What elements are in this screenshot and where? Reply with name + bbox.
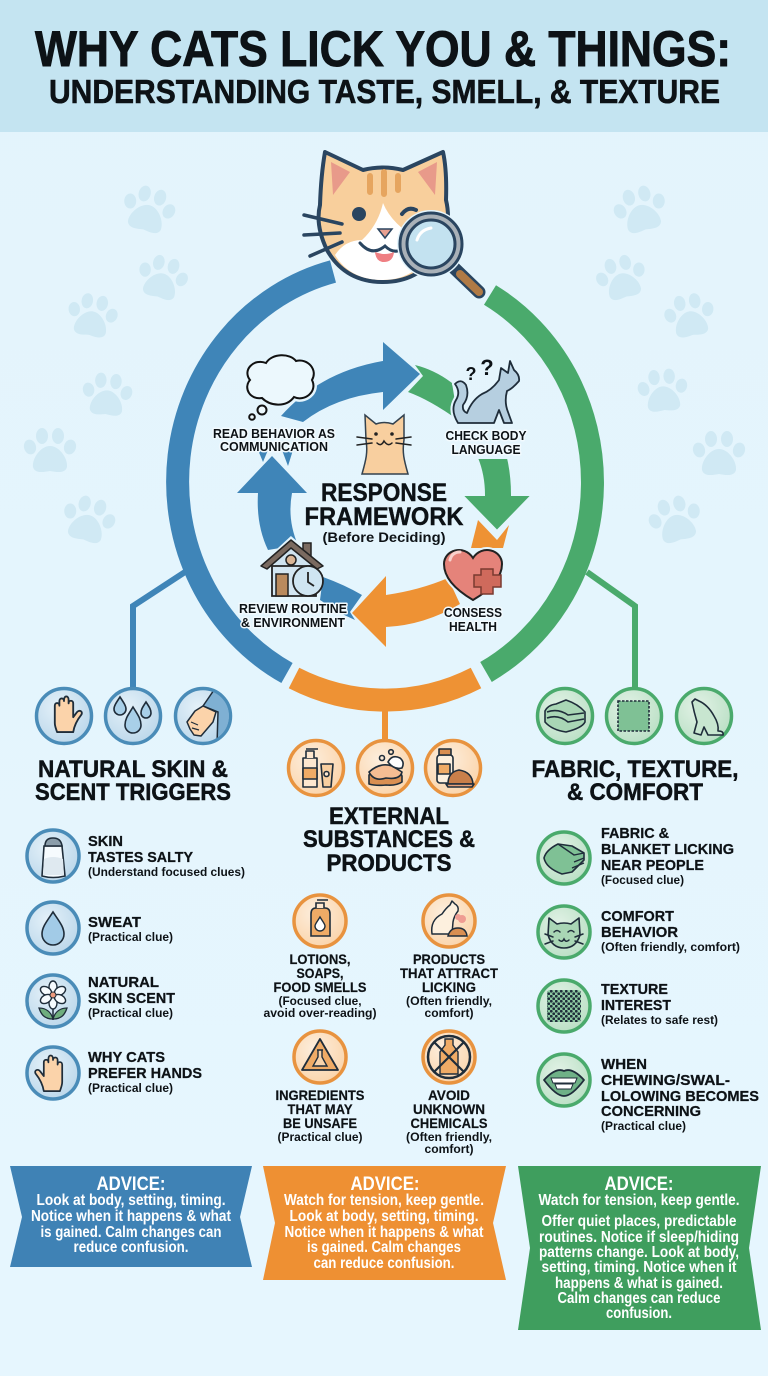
item: why cats prefer hands bbox=[27, 1047, 202, 1099]
heading: PRODUCTS bbox=[326, 850, 452, 877]
advice banner: blue: reduce confusion. bbox=[74, 1239, 188, 1256]
heading bbox=[35, 756, 231, 806]
advice banner: blue: Look at body, setting, timing. bbox=[36, 1192, 226, 1209]
label: consess health bbox=[444, 605, 502, 634]
item: why cats prefer hands: PREFER HANDS bbox=[88, 1065, 202, 1082]
icon: house with clock bbox=[261, 540, 323, 596]
connector: green bbox=[587, 572, 635, 690]
item: products that attract licking bbox=[400, 895, 498, 1020]
advice banner: green: setting, timing. Notice when it bbox=[542, 1259, 736, 1276]
advice banner: orange: Look at body, setting, timing. bbox=[290, 1208, 478, 1225]
advice banner: blue: Notice when it happens & what bbox=[31, 1208, 231, 1225]
ring segment: blue bbox=[178, 272, 333, 673]
panel: fabric, texture and comfort bbox=[532, 688, 759, 1133]
icon row: blue bbox=[36, 688, 230, 744]
arrow: green top bbox=[408, 365, 458, 420]
advice banner: blue bbox=[10, 1166, 252, 1267]
item: natural skin scent: SKIN SCENT bbox=[88, 990, 175, 1007]
arrow: green down bbox=[462, 458, 532, 531]
item: when chewing becomes concerning bbox=[538, 1054, 759, 1133]
item: products that attract licking: (Often friendly, bbox=[406, 994, 492, 1008]
arrow: blue left bbox=[237, 456, 307, 550]
icon row: green bbox=[538, 688, 732, 744]
item: avoid unknown chemicals bbox=[406, 1031, 492, 1156]
icon row: orange bbox=[288, 740, 480, 796]
advice banner: orange: can reduce confusion. bbox=[314, 1255, 454, 1272]
item: fabric and blanket licking: FABRIC & bbox=[601, 825, 669, 842]
item: when chewing becomes concerning: LOLOWING BECOMES bbox=[601, 1088, 759, 1105]
item: ingredients that may be unsafe bbox=[276, 1031, 364, 1144]
icon: heart with cross bbox=[444, 550, 502, 600]
advice banner: green bbox=[518, 1166, 761, 1330]
item: when chewing becomes concerning: WHEN bbox=[601, 1056, 647, 1073]
item: avoid unknown chemicals: comfort) bbox=[424, 1142, 474, 1156]
advice banner: orange: ADVICE: bbox=[350, 1174, 420, 1195]
connector: orange bbox=[382, 705, 388, 742]
item: fabric and blanket licking: (Focused clue) bbox=[601, 873, 684, 887]
header band bbox=[0, 0, 768, 132]
item: texture interest bbox=[538, 980, 718, 1032]
item: skin tastes salty: (Understand focused clues) bbox=[88, 865, 245, 879]
connector: blue bbox=[133, 572, 185, 690]
icon: sitting cat with question marks: ? bbox=[480, 355, 494, 380]
item: comfort behavior: (Often friendly, comfort) bbox=[601, 940, 740, 954]
center title: (Before Deciding) bbox=[322, 530, 446, 545]
item: ingredients that may be unsafe: BE UNSAFE bbox=[283, 1115, 357, 1131]
icon: cat scratching bbox=[692, 699, 723, 735]
background paw prints bbox=[22, 181, 747, 548]
item: avoid unknown chemicals: CHEMICALS bbox=[410, 1115, 488, 1131]
item: comfort behavior bbox=[538, 906, 740, 958]
ring segment: green bbox=[486, 295, 592, 672]
advice banner: green: Offer quiet places, predictable bbox=[542, 1213, 737, 1230]
icon: open hand bbox=[55, 696, 82, 732]
label: review routine: REVIEW ROUTINE bbox=[239, 601, 347, 616]
item: why cats prefer hands: (Practical clue) bbox=[88, 1081, 173, 1095]
arrow tail: blue fragments bbox=[258, 450, 293, 466]
icon: arm reaching bbox=[186, 692, 229, 738]
advice banner: green: confusion. bbox=[606, 1305, 672, 1322]
heading: SUBSTANCES & bbox=[303, 826, 475, 853]
item: texture interest: TEXTURE bbox=[601, 981, 668, 998]
arrow tail: blue bbox=[320, 577, 362, 620]
advice banner: blue: is gained. Calm changes can bbox=[40, 1224, 222, 1241]
item: lotions soaps food smells: avoid over-reading) bbox=[264, 1006, 377, 1020]
heading: & COMFORT bbox=[567, 779, 703, 806]
ring segment: orange bbox=[294, 678, 476, 700]
label: consess health: HEALTH bbox=[449, 619, 497, 634]
advice banner: orange: Notice when it happens & what bbox=[284, 1224, 484, 1241]
item: sweat: (Practical clue) bbox=[88, 930, 173, 944]
outer ring bbox=[178, 272, 592, 700]
item: products that attract licking: LICKING bbox=[422, 979, 476, 995]
question marks: ? bbox=[466, 364, 476, 384]
item: ingredients that may be unsafe: (Practical clue) bbox=[278, 1130, 362, 1144]
arrow: blue top bbox=[281, 342, 420, 422]
icon: small center cat bbox=[357, 415, 411, 474]
item: natural skin scent bbox=[27, 974, 175, 1027]
item: why cats prefer hands: WHY CATS bbox=[88, 1049, 165, 1066]
arrow tail: orange bbox=[471, 520, 509, 548]
item: sweat: SWEAT bbox=[88, 914, 141, 931]
panel: external substances and products bbox=[264, 740, 498, 1156]
label: check body language bbox=[446, 428, 527, 457]
item: comfort behavior: BEHAVIOR bbox=[601, 924, 678, 941]
item: ingredients that may be unsafe: INGREDIENTS bbox=[276, 1087, 364, 1103]
center title: RESPONSE bbox=[321, 479, 447, 507]
item: lotions soaps food smells bbox=[264, 895, 377, 1020]
item: avoid unknown chemicals: UNKNOWN bbox=[413, 1101, 485, 1117]
label: review routine bbox=[239, 601, 347, 630]
item: natural skin scent: (Practical clue) bbox=[88, 1006, 173, 1020]
advice banner: green: Watch for tension, keep gentle. bbox=[538, 1192, 740, 1209]
item: texture interest: (Relates to safe rest) bbox=[601, 1013, 718, 1027]
magnifying glass bbox=[452, 266, 479, 292]
item: products that attract licking: THAT ATTRACT bbox=[400, 965, 498, 981]
advice banner: orange bbox=[263, 1166, 506, 1280]
icon: thought cloud bbox=[247, 355, 314, 420]
item: fabric and blanket licking: NEAR PEOPLE bbox=[601, 857, 704, 874]
label: read behavior bbox=[213, 426, 335, 454]
item: products that attract licking: comfort) bbox=[424, 1006, 474, 1020]
label: review routine: & ENVIRONMENT bbox=[241, 615, 345, 630]
panel: natural skin and scent triggers bbox=[27, 688, 245, 1099]
item: lotions soaps food smells: FOOD SMELLS bbox=[274, 979, 366, 995]
item: lotions soaps food smells: LOTIONS, bbox=[290, 951, 350, 967]
label: read behavior: COMMUNICATION bbox=[220, 439, 328, 454]
heading bbox=[532, 756, 738, 806]
icon: fabric swatch bbox=[618, 701, 649, 731]
item: when chewing becomes concerning: CHEWING/SWAL- bbox=[601, 1072, 730, 1089]
heading: NATURAL SKIN & bbox=[38, 756, 228, 783]
icon: bottle and food bowl bbox=[437, 749, 474, 787]
advice banner: green: Calm changes can reduce bbox=[558, 1290, 721, 1307]
item: when chewing becomes concerning: CONCERNING bbox=[601, 1103, 701, 1120]
cat mascot with magnifying glass bbox=[304, 152, 479, 292]
advice banner: orange: is gained. Calm changes bbox=[307, 1239, 461, 1256]
arrow: orange bbox=[352, 576, 460, 647]
item: natural skin scent: NATURAL bbox=[88, 974, 159, 991]
label: check body language: LANGUAGE bbox=[452, 442, 521, 457]
icon: folded blanket bbox=[545, 700, 585, 732]
heading: EXTERNAL bbox=[329, 803, 449, 830]
advice banner: green: patterns change. Look at body, bbox=[539, 1244, 739, 1261]
item: lotions soaps food smells: (Focused clue, bbox=[278, 994, 362, 1008]
item: ingredients that may be unsafe: THAT MAY bbox=[288, 1101, 353, 1117]
item: avoid unknown chemicals: (Often friendly, bbox=[406, 1130, 492, 1144]
heading bbox=[303, 803, 475, 877]
advice banner: green: happens & what is gained. bbox=[555, 1275, 723, 1292]
heading: SCENT TRIGGERS bbox=[35, 779, 231, 806]
item: avoid unknown chemicals: AVOID bbox=[428, 1087, 470, 1103]
icon: three drops bbox=[114, 697, 151, 733]
advice banner: orange: Watch for tension, keep gentle. bbox=[284, 1192, 484, 1209]
item: skin tastes salty bbox=[27, 830, 245, 882]
label: read behavior: READ BEHAVIOR AS bbox=[213, 426, 335, 441]
icon: sitting cat with question marks bbox=[453, 355, 519, 423]
advice banner: green: routines. Notice if sleep/hiding bbox=[539, 1229, 739, 1246]
inner cycle arrows bbox=[237, 342, 532, 647]
item: skin tastes salty: SKIN bbox=[88, 833, 123, 850]
item: when chewing becomes concerning: (Practical clue) bbox=[601, 1119, 686, 1133]
item: comfort behavior: COMFORT bbox=[601, 908, 674, 925]
label: check body language: CHECK BODY bbox=[446, 428, 527, 443]
heading: FABRIC, TEXTURE, bbox=[532, 756, 738, 783]
item: fabric and blanket licking bbox=[538, 825, 734, 887]
icon: soap bbox=[369, 750, 403, 785]
item: skin tastes salty: TASTES SALTY bbox=[88, 849, 193, 866]
icon: lotion bottles bbox=[303, 749, 333, 787]
cat head bbox=[319, 152, 448, 282]
center title bbox=[304, 479, 464, 545]
item: lotions soaps food smells: SOAPS, bbox=[296, 965, 344, 981]
item: sweat bbox=[27, 902, 173, 954]
center title: FRAMEWORK bbox=[304, 503, 464, 531]
advice banner: blue: ADVICE: bbox=[96, 1174, 166, 1195]
label: consess health: CONSESS bbox=[444, 605, 502, 620]
item: products that attract licking: PRODUCTS bbox=[413, 951, 485, 967]
item: texture interest: INTEREST bbox=[601, 997, 671, 1014]
item: fabric and blanket licking: BLANKET LICKING bbox=[601, 841, 734, 858]
advice banner: green: ADVICE: bbox=[604, 1174, 674, 1195]
